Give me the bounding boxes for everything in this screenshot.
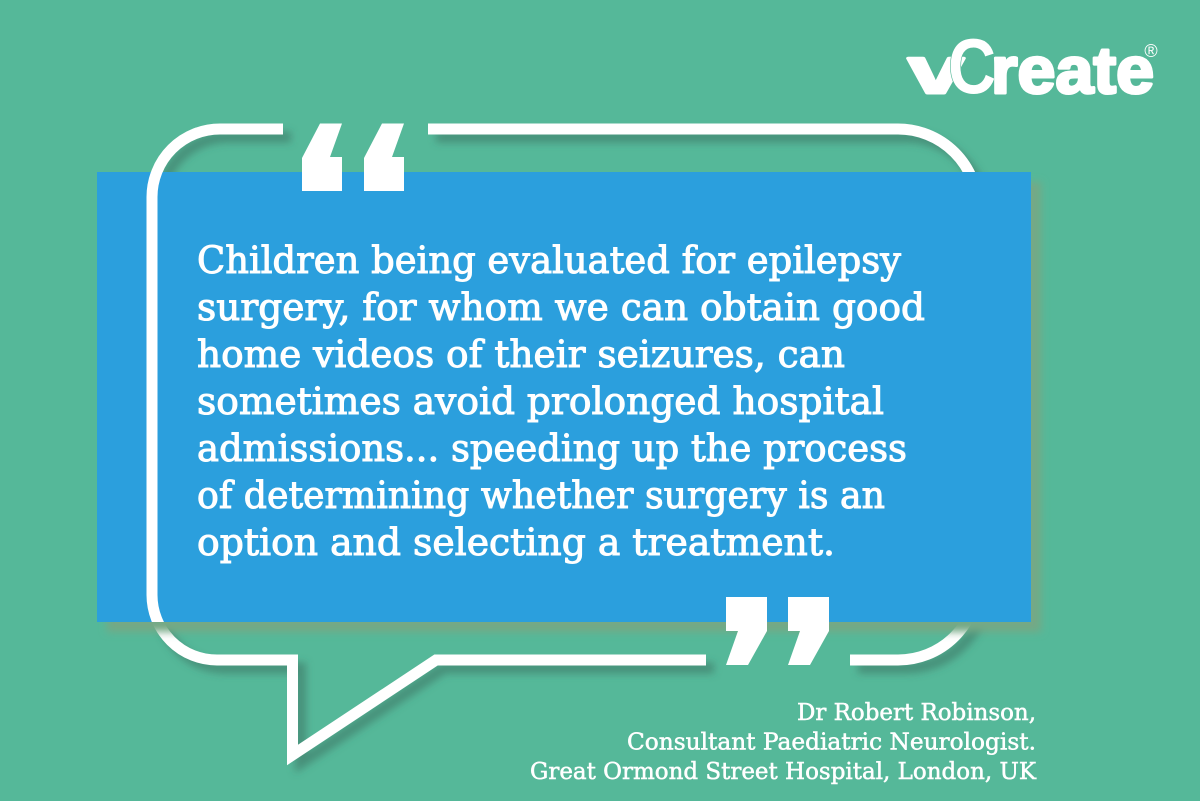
attribution: Great Ormond Street Hospital, London, UK bbox=[530, 759, 1037, 785]
quote text: sometimes avoid prolonged hospital bbox=[197, 380, 884, 423]
attribution: Dr Robert Robinson, bbox=[797, 700, 1036, 726]
quote text: Children being evaluated for epilepsy bbox=[197, 239, 901, 282]
quote text: option and selecting a treatment. bbox=[197, 521, 835, 564]
speech bubble outline bbox=[152, 129, 986, 763]
vCreate logo bbox=[908, 22, 1158, 110]
blue quote panel shadow bbox=[107, 182, 1041, 632]
attribution: Consultant Paediatric Neurologist. bbox=[627, 730, 1036, 756]
quote text: admissions... speeding up the process bbox=[197, 427, 907, 470]
quote text: surgery, for whom we can obtain good bbox=[197, 286, 925, 329]
vCreate logo: ® bbox=[1144, 41, 1158, 61]
attribution bbox=[530, 700, 1037, 785]
speech bubble left edge over panel bbox=[146, 172, 164, 622]
icon: closing quotation mark bbox=[726, 597, 829, 665]
vCreate logo: reate bbox=[991, 33, 1154, 107]
blue quote panel bbox=[97, 172, 1031, 622]
quote text bbox=[197, 239, 925, 564]
vCreate logo: v bbox=[908, 33, 964, 107]
quote text: home videos of their seizures, can bbox=[197, 333, 845, 376]
quote text: of determining whether surgery is an bbox=[197, 474, 885, 517]
icon: opening quotation mark bbox=[302, 124, 404, 191]
vCreate logo: C bbox=[948, 22, 996, 110]
